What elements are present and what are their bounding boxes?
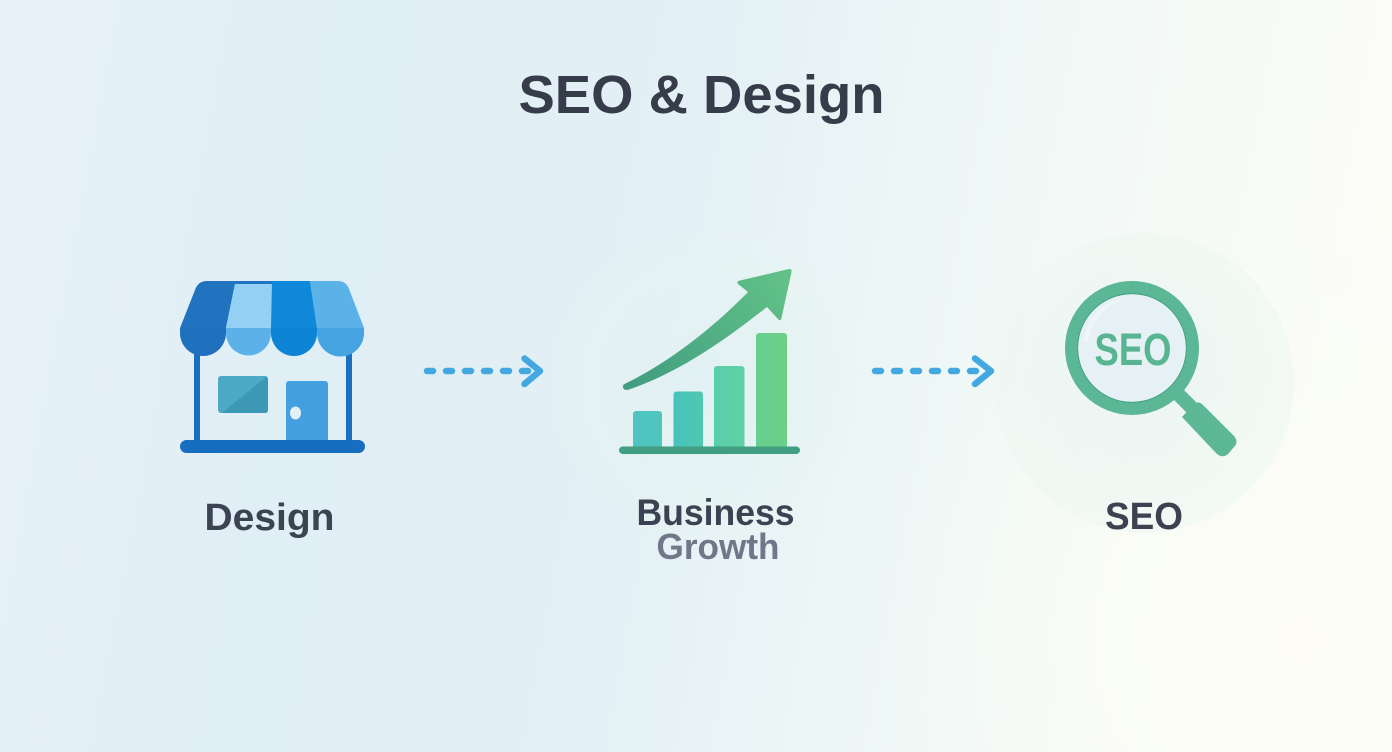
store window xyxy=(218,376,268,413)
arrow: design to growth xyxy=(427,358,540,384)
icon: bar chart with growth arrow xyxy=(619,269,800,454)
label: Design: Design xyxy=(204,497,334,539)
bar 3 xyxy=(714,366,744,448)
label line: Business: Business xyxy=(636,492,794,533)
store base xyxy=(180,440,365,453)
icon: magnifying glass with SEO xyxy=(1072,288,1236,456)
label: SEO: SEO xyxy=(1105,496,1183,538)
magnifier handle xyxy=(1171,387,1236,456)
store awning xyxy=(180,281,364,356)
growth arrow xyxy=(623,269,792,390)
title: SEO & Design xyxy=(518,65,884,125)
background glow: business growth xyxy=(553,229,863,539)
label: Business Growth xyxy=(636,492,794,567)
bar 2 xyxy=(674,392,703,448)
magnifier lens xyxy=(1077,293,1187,403)
chart baseline xyxy=(619,446,800,454)
arrow: growth to SEO xyxy=(875,358,991,384)
store posts xyxy=(194,350,352,442)
store door xyxy=(286,381,328,440)
bar 4 xyxy=(756,333,787,448)
magnifier ring xyxy=(1072,288,1192,408)
icon: storefront xyxy=(180,281,365,453)
bar 1 xyxy=(633,411,662,448)
background glow: SEO xyxy=(994,233,1294,533)
magnifier text: SEO xyxy=(1094,324,1172,375)
label line: Growth: Growth xyxy=(656,526,780,567)
